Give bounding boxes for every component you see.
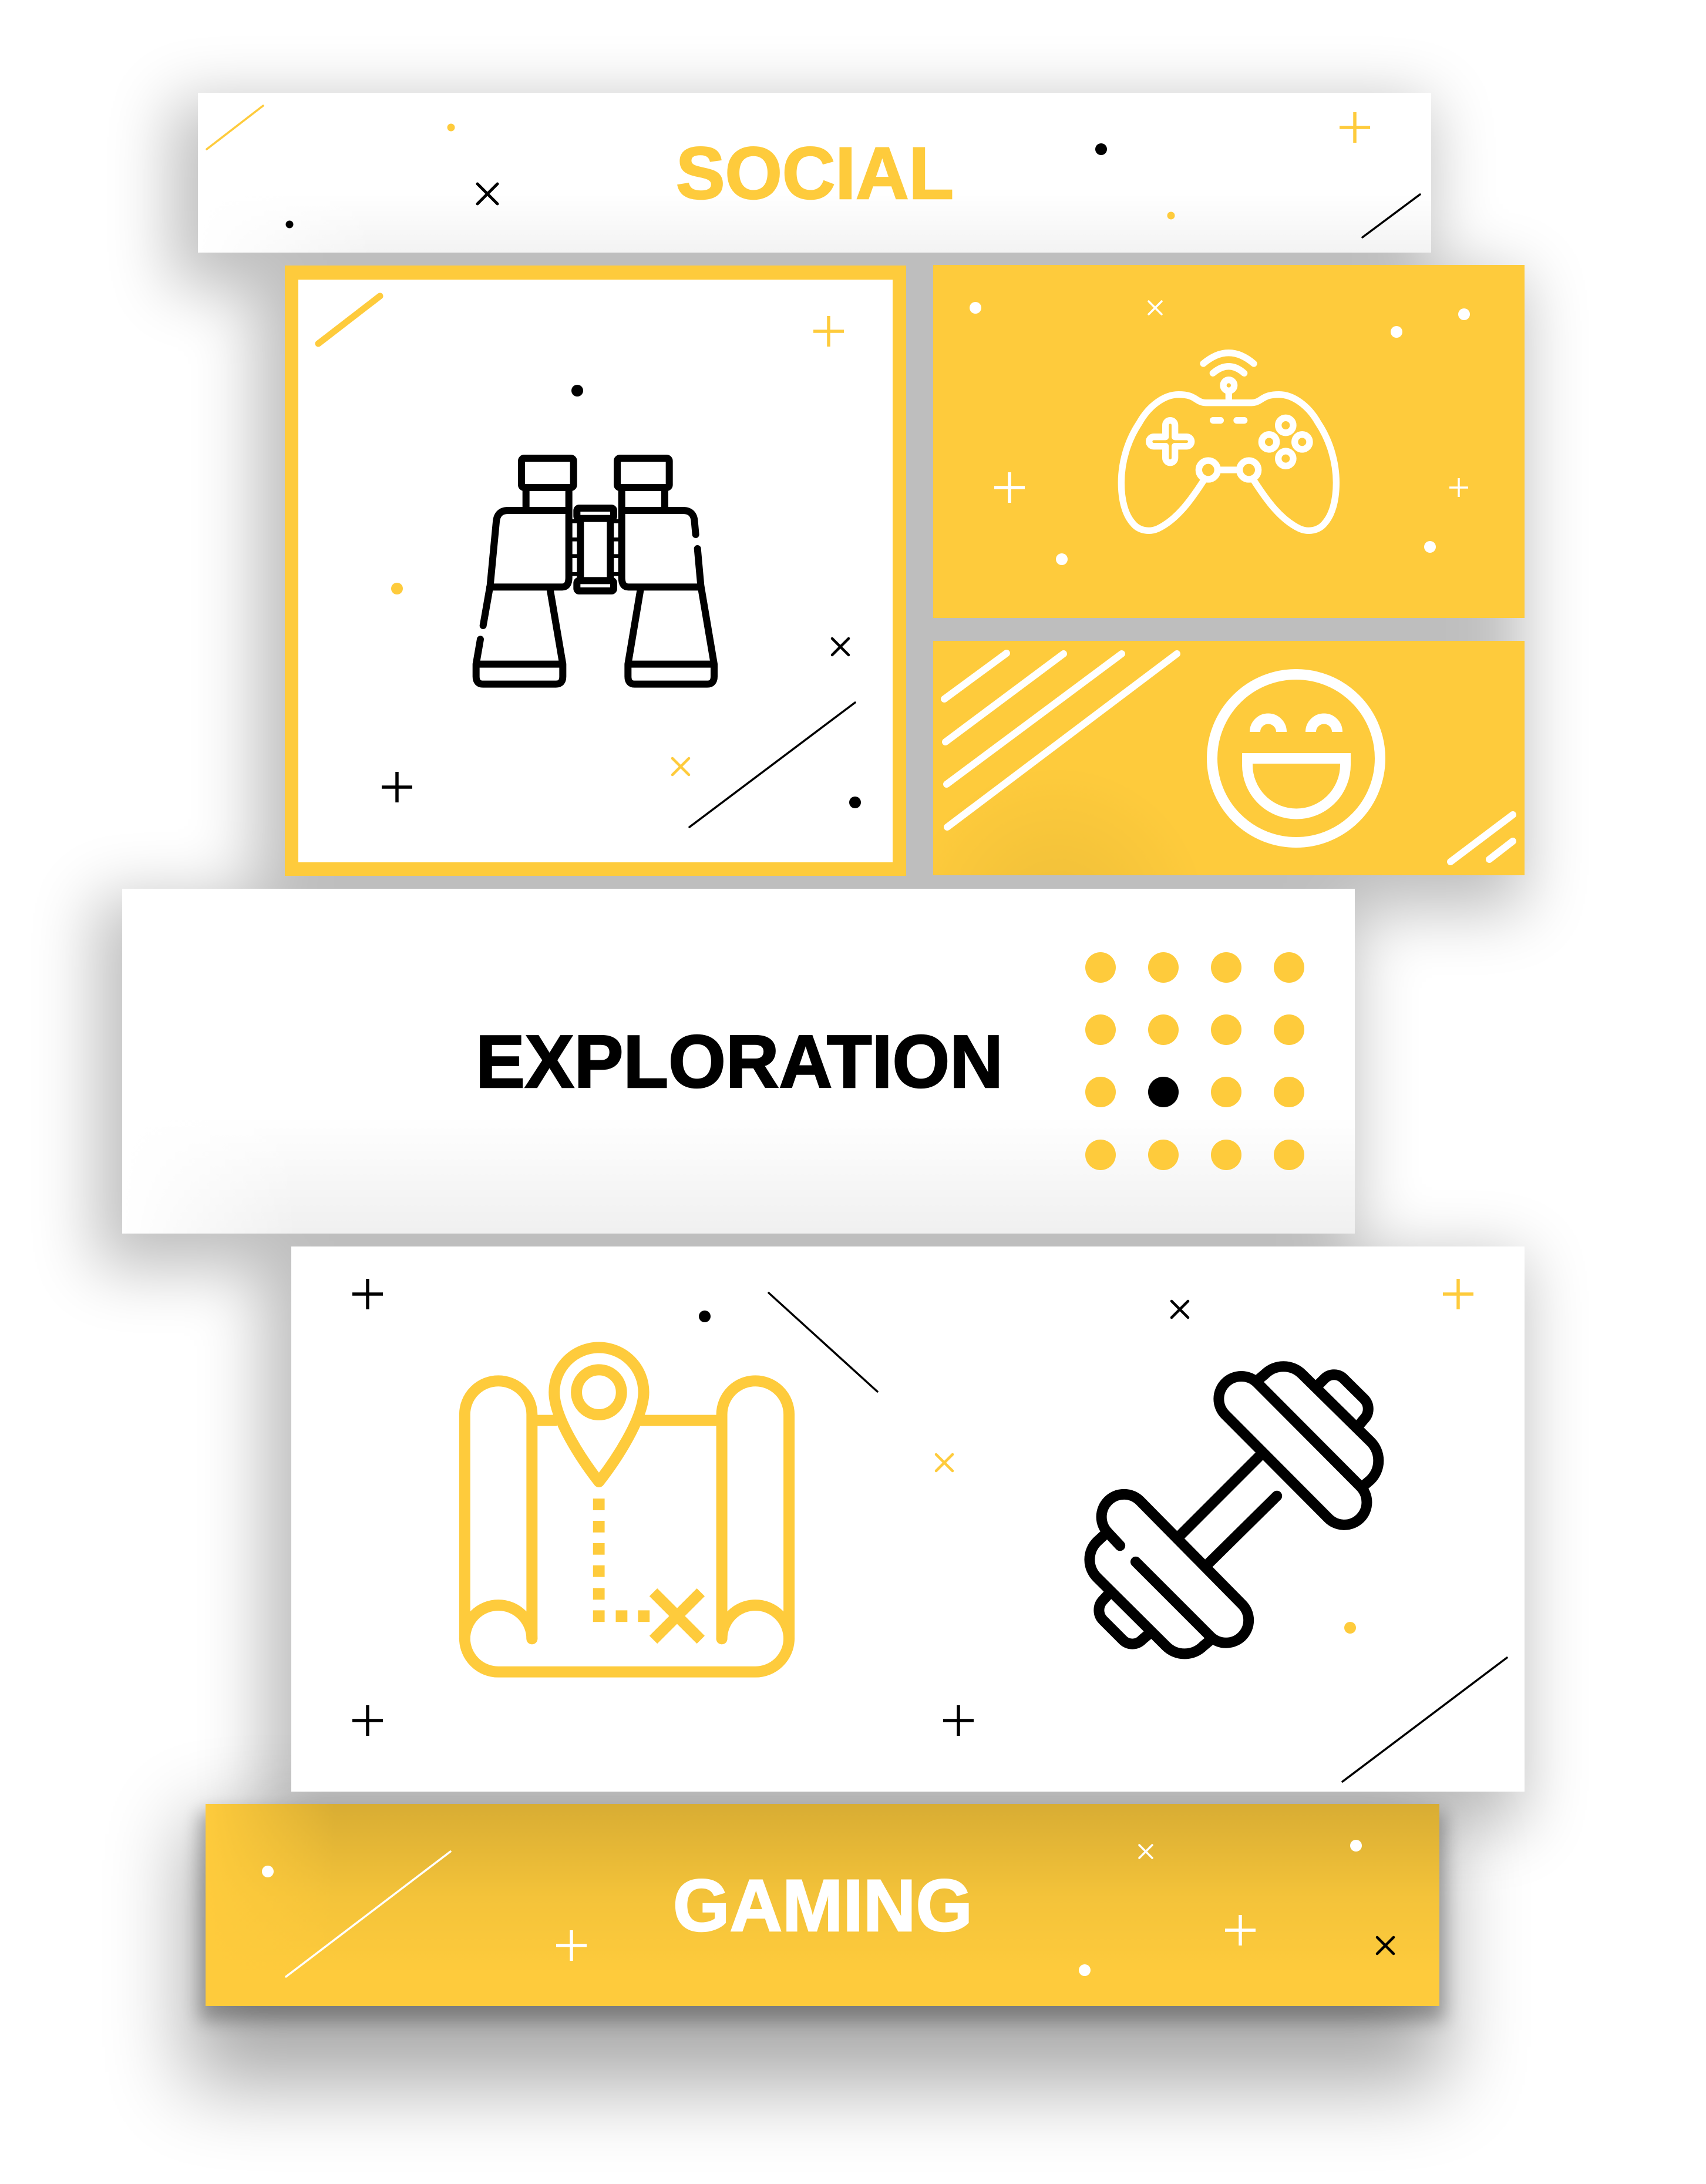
decorative marks	[207, 106, 1420, 237]
icon: laughing face	[1212, 674, 1380, 842]
title: SOCIAL: SOCIAL	[676, 133, 954, 214]
icon: dumbbell	[1089, 1366, 1378, 1654]
icon: binoculars	[476, 458, 714, 684]
panel: binoculars card	[285, 266, 906, 876]
panel: SOCIAL banner	[198, 93, 1431, 253]
decorative marks	[970, 301, 1470, 565]
decorative marks	[318, 296, 861, 827]
panel: gaming banner	[206, 1804, 1439, 2006]
dot grid	[1085, 952, 1304, 1170]
panel: smiley card	[933, 641, 1525, 875]
panel: map and dumbbell card	[291, 1246, 1525, 1792]
soft shadows behind cards	[96, 101, 1525, 2085]
decorative marks	[262, 1840, 1394, 1977]
panel: EXPLORATION banner	[122, 889, 1355, 1234]
decorative marks	[352, 1279, 1507, 1782]
panel: game controller card	[933, 265, 1525, 618]
icon: game controller	[1121, 353, 1336, 530]
title: EXPLORATION: EXPLORATION	[476, 1020, 1003, 1103]
title: GAMING: GAMING	[673, 1865, 973, 1947]
icon: treasure map	[465, 1348, 789, 1672]
decorative stripes	[944, 653, 1513, 862]
